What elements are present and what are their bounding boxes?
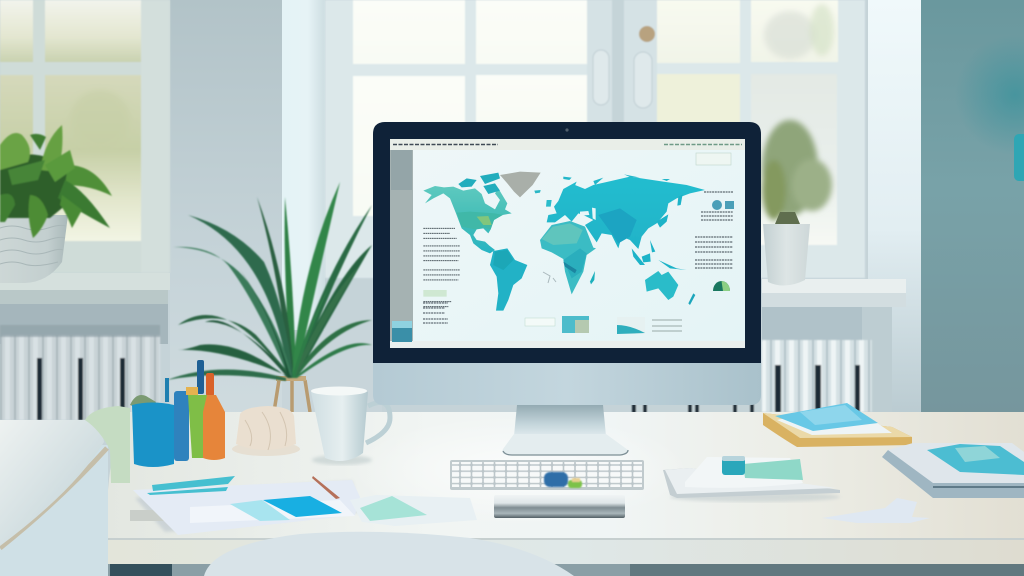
world map: old world	[540, 174, 705, 305]
potted plant right	[762, 120, 832, 286]
monitor	[373, 122, 761, 405]
right window sill	[762, 279, 906, 412]
eurasia	[547, 177, 705, 249]
binders stack right	[882, 443, 1024, 498]
usa band	[457, 212, 503, 229]
center window	[325, 0, 865, 278]
arctic islands	[458, 173, 500, 194]
mug	[311, 386, 390, 465]
greenland	[500, 172, 541, 197]
left foreground cabinet	[0, 420, 108, 576]
potted plant center	[167, 182, 372, 412]
keyboard	[450, 460, 644, 490]
right text blocks	[695, 192, 733, 268]
south america	[490, 248, 527, 311]
left window	[0, 0, 170, 273]
pacific island marks	[543, 272, 556, 283]
notebook with yellow edge	[763, 403, 912, 447]
lower-left text and table	[423, 303, 448, 323]
chair back	[204, 532, 574, 576]
top right card	[696, 153, 731, 165]
potted plant left	[0, 125, 112, 283]
bottom captions and photos	[525, 316, 682, 334]
desk	[108, 412, 1024, 576]
world map: americas	[423, 172, 541, 311]
right radiator	[632, 340, 872, 413]
new zealand	[688, 293, 695, 305]
loose note	[822, 498, 930, 523]
east asian and indonesian islands	[632, 194, 687, 270]
document stack center right	[663, 456, 840, 502]
left text block	[423, 228, 460, 307]
left radiator	[0, 325, 160, 420]
madagascar	[590, 271, 595, 284]
iceland	[534, 190, 541, 193]
inland seas	[580, 208, 596, 220]
screen with world map	[390, 139, 745, 348]
small blue clip and marker	[544, 472, 582, 488]
north america	[423, 186, 512, 253]
arctic russia islands	[563, 174, 670, 185]
right teal wall	[921, 0, 1024, 415]
left window sill	[0, 273, 170, 344]
open papers left	[130, 476, 477, 535]
uk	[546, 200, 552, 207]
phone	[494, 495, 625, 518]
australia	[645, 271, 678, 300]
monitor stand	[502, 405, 628, 455]
pen holder with markers	[130, 360, 225, 467]
side mini chart	[712, 200, 734, 210]
green pie chart	[713, 281, 730, 291]
green folder behind cup	[85, 406, 130, 483]
africa	[540, 221, 596, 294]
fabric roll	[232, 406, 300, 456]
